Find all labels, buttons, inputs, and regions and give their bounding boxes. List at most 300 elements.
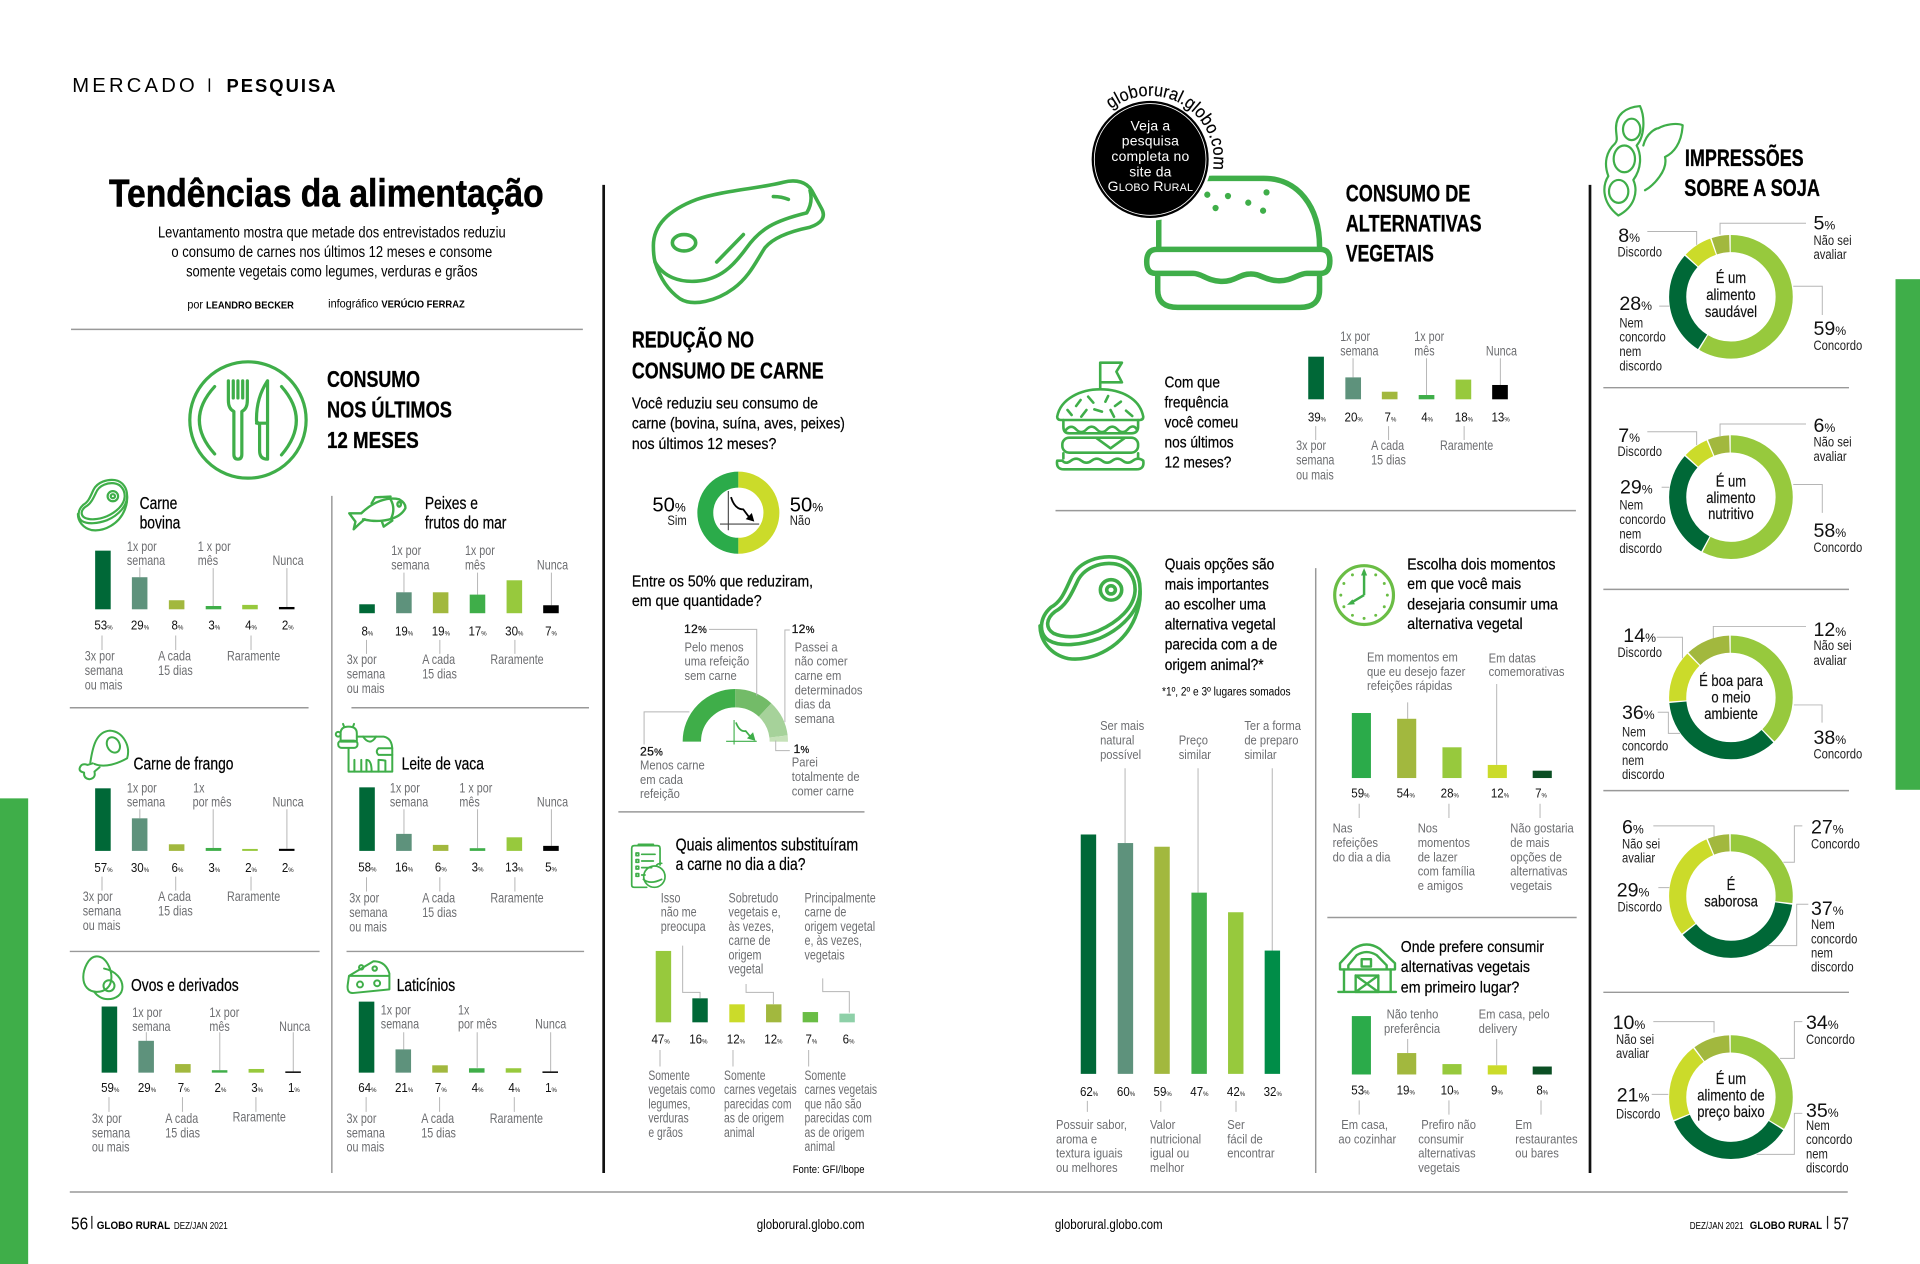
bar chart: momentos: refeições rápidas [1367, 678, 1452, 693]
bar chart: peixes: 30% [505, 624, 524, 638]
bar chart: carne bovina: Raramente [227, 648, 280, 664]
icon: soybean pod [1604, 106, 1683, 216]
heading [676, 835, 858, 874]
half donut chart: quantidade: dias da [795, 697, 831, 712]
heading: consumo nos últimos 12 meses: CONSUMO [327, 366, 420, 392]
section label: Mercado | Pesquisa: MERCADO [72, 75, 195, 97]
donut: saborosa: 29% [1617, 880, 1649, 902]
bar chart: opções: de preparo [1244, 733, 1299, 748]
section label: Mercado | Pesquisa [72, 75, 336, 97]
bar chart: frequência: semana [1340, 343, 1379, 359]
bar chart: leite: semana [349, 905, 388, 920]
question: reduziu consumo: Você reduziu seu consumo de [632, 395, 818, 412]
bar chart: carne bovina: semana [85, 663, 123, 678]
question: alternativa vegetal [1407, 616, 1523, 633]
question: com que frequência: Com que [1164, 374, 1220, 392]
bar chart: momentos: 28% [1441, 786, 1459, 801]
bar chart: frango: 1x por [127, 780, 157, 796]
heading: a carne no dia a dia? [676, 854, 805, 874]
half donut chart: quantidade: carne em [795, 668, 841, 683]
bar chart: laticínios: semana [347, 1125, 385, 1141]
bar chart: frequência: mês [1414, 343, 1435, 359]
bar chart: onde: ao cozinhar [1338, 1132, 1396, 1146]
donut: preço baixo: concordo [1806, 1131, 1852, 1147]
bar chart: laticínios: semana [381, 1016, 419, 1032]
half donut chart: quantidade: sem carne [684, 668, 737, 683]
donut: alimento nutritivo: É um [1716, 473, 1746, 491]
panel: redução no consumo de carne [632, 181, 863, 801]
bar chart: alimentos substitutos [648, 890, 877, 1154]
bar chart: carne bovina: 3x por [85, 648, 115, 664]
panel: consumo de alternativas vegetais [1056, 86, 1517, 483]
bar chart: opções: 60% [1117, 1084, 1135, 1099]
panel: leite de vaca [336, 724, 568, 935]
bar chart: carne bovina [85, 539, 304, 693]
bar chart: carne bovina: mês [198, 553, 218, 569]
heading: bovina [140, 514, 180, 533]
bar chart: opções: natural [1100, 733, 1134, 748]
bar chart: frango: Nunca [272, 794, 304, 810]
bar chart: leite: Nunca [537, 794, 568, 810]
bar chart: alimentos substitutos: vegetais e, [729, 905, 781, 920]
bar chart: leite: semana [390, 794, 428, 810]
bar chart: leite: 5% [545, 860, 557, 875]
heading: Ovos e derivados [131, 977, 239, 996]
bar chart: alimentos substitutos: e, às vezes, [804, 933, 862, 948]
donut: boa para o meio ambiente: Nem [1622, 723, 1646, 740]
icon: steak [78, 480, 127, 530]
donut: boa para o meio ambiente: concordo [1622, 737, 1668, 754]
question: Quais opções são [1165, 557, 1274, 574]
bar chart: opções: melhor [1150, 1160, 1184, 1175]
icon: cheese [348, 961, 389, 993]
bar chart: peixes: 7% [545, 624, 557, 638]
bar chart: onde: Em casa, pelo [1479, 1007, 1550, 1022]
bar chart: leite: A cada [422, 890, 455, 906]
intro text [158, 225, 506, 281]
bar chart: alimentos substitutos: Somente [804, 1068, 846, 1083]
bar chart: momentos: com família [1418, 864, 1475, 879]
bar chart: momentos: e amigos [1418, 878, 1463, 893]
heading: consumo nos últimos 12 meses: NOS ÚLTIMOS [327, 396, 452, 423]
bar chart: laticínios: 15 dias [421, 1125, 456, 1141]
donut: saborosa: Não sei [1622, 835, 1660, 852]
half donut chart: quantidade: semana [795, 711, 835, 726]
panel: carne de frango [80, 731, 304, 933]
footer: left page: 56 [71, 1213, 88, 1233]
donut chart: 50% sim, 50% não: 50% [790, 494, 823, 516]
heading: Carne [140, 494, 177, 513]
bar chart: momentos: refeições [1333, 835, 1378, 850]
donut: boa para o meio ambiente [1618, 619, 1862, 782]
bar chart: peixes [347, 543, 568, 696]
donut: alimento saudável: Nem [1619, 314, 1643, 331]
bar chart: onde: Em [1515, 1117, 1532, 1132]
footer: right page: globorural.globo.com [1055, 1217, 1163, 1232]
donut: boa para o meio ambiente: Não sei [1813, 637, 1852, 654]
bar chart: alimentos substitutos: parecidas com [724, 1096, 791, 1112]
question: origem animal?* [1165, 657, 1264, 674]
donut: boa para o meio ambiente: discordo [1622, 766, 1665, 782]
half donut chart: quantidade: comer carne [792, 784, 854, 799]
bar chart: opções: Ser mais [1100, 718, 1144, 733]
bar chart: alimentos substitutos: Somente [724, 1068, 766, 1083]
bar chart: frequência: 18% [1455, 410, 1473, 425]
bar chart: frequência: 1x por [1340, 329, 1370, 344]
donut: boa para o meio ambiente: ambiente [1704, 706, 1758, 723]
half donut chart: quantidade: 12% [684, 622, 707, 636]
footer: left page: GLOBO RURAL [97, 1220, 171, 1232]
bar chart: momentos: de mais [1510, 835, 1549, 850]
bar chart: frango: 2% [282, 861, 294, 875]
half donut chart: quantidade: uma refeição [684, 654, 750, 669]
bar chart: laticínios: 7% [435, 1081, 447, 1095]
icon: big burger [1147, 178, 1330, 307]
bar chart: alimentos substitutos: carne de [729, 933, 771, 948]
bar chart: frango: 1x [193, 780, 204, 796]
bar chart: momentos: de lazer [1418, 850, 1458, 864]
bar chart: momentos: Em momentos em [1367, 650, 1458, 665]
bar chart: opções: igual ou [1150, 1146, 1189, 1161]
donut: alimento nutritivo: avaliar [1813, 448, 1847, 464]
bar chart: leite: 15 dias [422, 905, 457, 920]
bar chart: opções: Ter a forma [1244, 718, 1301, 733]
bar chart: peixes: 8% [361, 624, 374, 638]
question: ao escolher uma [1165, 597, 1267, 614]
donut: preço baixo: discordo [1806, 1159, 1849, 1176]
bar chart: alimentos substitutos: legumes, [648, 1096, 690, 1112]
donut: alimento nutritivo: Não sei [1813, 433, 1852, 450]
icon: barn [1338, 944, 1396, 992]
donut: alimento nutritivo: discordo [1619, 540, 1662, 556]
donut chart: 50% sim, 50% não: Não [790, 512, 810, 528]
bar chart: momentos: 59% [1351, 786, 1370, 801]
bar chart: ovos: 3% [251, 1081, 263, 1095]
question: em que quantidade: em que quantidade? [632, 593, 762, 610]
bar chart: frequência: Nunca [1486, 343, 1517, 359]
bar chart: carne bovina: 4% [245, 618, 257, 633]
bar chart: alimentos substitutos: origem vegetal [804, 919, 875, 934]
donut: boa para o meio ambiente: Concordo [1813, 745, 1862, 762]
donut: saborosa: Discordo [1618, 898, 1662, 915]
bar chart: frequência: 1x por [1414, 329, 1444, 344]
bar chart: frequência: A cada [1371, 438, 1404, 453]
bar chart: onde: 10% [1441, 1083, 1459, 1098]
bar chart: onde: consumir [1418, 1132, 1464, 1146]
bar chart: peixes: 19% [432, 624, 450, 638]
donut: preço baixo: Discordo [1616, 1105, 1660, 1122]
intro text: somente vegetais como legumes, verduras e grãos [186, 264, 478, 281]
heading: REDUÇÃO NO [632, 329, 754, 353]
donut: alimento nutritivo: 6% [1813, 415, 1835, 437]
donut: preço baixo: 34% [1806, 1012, 1839, 1034]
bar chart: onde: Em casa, [1341, 1117, 1388, 1132]
callout: veja a pesquisa completa: completa no [1111, 148, 1189, 164]
donut: alimento saudável: Não sei [1813, 232, 1852, 248]
panel: laticínios [347, 961, 566, 1155]
donut: saborosa: concordo [1811, 930, 1857, 947]
heading [1684, 144, 1820, 202]
half donut chart: quantidade: Menos carne [640, 758, 705, 773]
bar chart: ovos: 59% [101, 1081, 120, 1095]
donut: alimento saudável: É um [1716, 270, 1746, 288]
bar chart: onde: ou bares [1515, 1146, 1559, 1161]
donut: saborosa: nem [1811, 944, 1833, 961]
bar chart: opções: fácil de [1227, 1132, 1263, 1146]
bar chart: frango [83, 780, 304, 933]
bar chart: momentos [1333, 650, 1574, 893]
question: parecida com a de [1165, 637, 1277, 654]
bar chart: carne bovina: 8% [172, 618, 184, 633]
bar chart: carne bovina: 1x por [127, 539, 157, 554]
heading: SOBRE A SOJA [1684, 175, 1820, 202]
donut: alimento saudável: 28% [1619, 293, 1652, 315]
panel: carne bovina [78, 480, 304, 693]
bar chart: peixes: 19% [395, 624, 414, 638]
bar chart: momentos: vegetais [1510, 878, 1552, 893]
bar chart: opções [1056, 718, 1301, 1175]
question [1401, 939, 1545, 997]
bar chart: momentos: comemorativas [1489, 664, 1565, 679]
donut: saborosa: 37% [1811, 898, 1844, 920]
callout: veja a pesquisa completa: pesquisa [1122, 133, 1179, 149]
donut: saborosa [1617, 816, 1860, 975]
bar chart: ovos: mês [209, 1019, 230, 1034]
bar chart: onde: 9% [1491, 1083, 1503, 1098]
bar chart: peixes: 3x por [347, 652, 377, 667]
donut: alimento saudável [1618, 213, 1862, 374]
donut: preço baixo: avaliar [1616, 1045, 1650, 1061]
bar chart: leite: 6% [435, 860, 447, 875]
panel: opções mais importantes [1040, 557, 1301, 1175]
bar chart: frequência: semana [1296, 453, 1335, 468]
panel: quais alimentos substituíram [632, 835, 877, 1176]
callout: veja a pesquisa completa: Veja a [1130, 117, 1170, 133]
bar chart: alimentos substitutos: 6% [843, 1032, 855, 1046]
bar chart: onde: Prefiro não [1421, 1117, 1476, 1132]
bar chart: momentos: Não gostaria [1510, 821, 1574, 836]
icon: chicken leg [80, 731, 128, 779]
bar chart: alimentos substitutos: carne de [804, 905, 847, 920]
bar chart: opções: encontrar [1227, 1146, 1275, 1161]
question: desejaria consumir uma [1407, 597, 1558, 614]
donut: preço baixo [1613, 1012, 1855, 1176]
donut: preço baixo: alimento de [1697, 1087, 1765, 1105]
donut: boa para o meio ambiente: Discordo [1618, 644, 1662, 660]
question: em primeiro lugar? [1401, 980, 1519, 997]
bar chart: opções: 59% [1154, 1084, 1172, 1099]
donut: preço baixo: Concordo [1806, 1031, 1855, 1047]
donut: alimento saudável: 5% [1813, 213, 1835, 235]
question: em que quantidade: Entre os 50% que reduziram, [632, 573, 813, 590]
intro text: o consumo de carnes nos últimos 12 meses e consome [171, 244, 492, 261]
bar chart: onde [1338, 1007, 1578, 1175]
question: reduziu consumo: carne (bovina, suína, aves, peixes) [632, 416, 845, 433]
question [1407, 556, 1558, 633]
bar chart: frequência: 15 dias [1371, 453, 1406, 468]
donut: preço baixo: Não sei [1616, 1031, 1654, 1047]
panel: ovos e derivados [83, 956, 311, 1155]
bar chart: alimentos substitutos: 7% [805, 1032, 818, 1046]
icon: eggs [83, 956, 122, 999]
bar chart: alimentos substitutos: animal [804, 1139, 835, 1154]
bar chart: alimentos substitutos: e grãos [648, 1124, 683, 1140]
donut: alimento saudável: alimento [1706, 287, 1756, 304]
half donut chart: quantidade: 12% [792, 622, 815, 636]
bar chart: ovos: 1x por [132, 1005, 162, 1020]
bar chart: laticínios [347, 1002, 566, 1155]
bar chart: opções: similar [1244, 747, 1277, 762]
bar chart: frango: 15 dias [158, 903, 193, 919]
bar chart: momentos: do dia a dia [1333, 850, 1391, 864]
bar chart: carne bovina: Nunca [272, 553, 304, 569]
half donut chart: quantidade: totalmente de [792, 769, 860, 784]
icon: clock [1335, 566, 1393, 624]
bar chart: leite: 3% [472, 860, 484, 875]
footer: left page: DEZ/JAN 2021 [174, 1221, 228, 1232]
donut: saborosa: É [1727, 877, 1735, 894]
panel: consumo nos últimos 12 meses [190, 362, 452, 478]
bar chart: opções: possível [1100, 747, 1141, 762]
bar chart: laticínios: 1% [545, 1081, 557, 1095]
bar chart: alimentos substitutos: preocupa [661, 919, 706, 934]
footer: right page: DEZ/JAN 2021 [1690, 1221, 1744, 1232]
bar chart: opções: nutricional [1150, 1132, 1201, 1146]
donut: saborosa: 6% [1622, 816, 1644, 838]
heading: CONSUMO DE CARNE [632, 360, 824, 384]
bar chart: ovos: A cada [165, 1111, 198, 1126]
bar chart: frequência: 3x por [1296, 438, 1326, 453]
bar chart: laticínios: ou mais [347, 1140, 384, 1155]
question: reduziu consumo [632, 395, 845, 453]
bar chart: ovos: 1x por [209, 1005, 239, 1020]
bar chart: opções: 47% [1190, 1084, 1209, 1099]
bar chart: alimentos substitutos: vegetal [729, 961, 763, 977]
bar chart: frequência: 7% [1385, 410, 1397, 425]
bar chart: ovos: 29% [138, 1081, 156, 1095]
bar chart: alimentos substitutos: vegetais [804, 947, 845, 963]
donut: alimento nutritivo: 29% [1620, 477, 1653, 499]
bar chart: onde: delivery [1479, 1021, 1517, 1036]
icon: plate with fork and knife [190, 362, 306, 478]
donut: alimento nutritivo: Nem [1619, 497, 1643, 513]
bar chart: laticínios: 64% [358, 1081, 377, 1095]
bar chart: onde: 8% [1536, 1083, 1548, 1098]
bar chart: laticínios: por mês [458, 1016, 497, 1032]
half donut chart: quantidade: Parei [792, 755, 818, 769]
half donut chart: quantidade: 1% [793, 742, 810, 756]
bar chart: ovos: Nunca [279, 1019, 311, 1034]
bar chart: alimentos substitutos: as de origem [724, 1110, 784, 1126]
bar chart: opções: aroma e [1056, 1132, 1097, 1146]
bar chart: laticínios: Raramente [490, 1111, 543, 1126]
donut: preço baixo: Nem [1806, 1117, 1830, 1133]
bar chart: onde: vegetais [1418, 1160, 1460, 1175]
question: com que frequência: você comeu [1164, 415, 1238, 432]
bar chart: alimentos substitutos: não me [661, 905, 697, 920]
bar chart: frequência [1296, 329, 1517, 483]
donut: alimento saudável: discordo [1619, 357, 1662, 374]
bar chart: ovos: ou mais [92, 1140, 130, 1155]
bar chart: ovos: Raramente [233, 1109, 286, 1125]
donut chart: 50% sim, 50% não [652, 480, 823, 546]
donut: alimento saudável: concordo [1619, 328, 1666, 345]
bar chart: alimentos substitutos: Sobretudo [729, 890, 778, 906]
title: Tendências da alimentação [109, 172, 544, 215]
donut: alimento nutritivo: nutritivo [1708, 506, 1754, 524]
bar chart: momentos: que eu desejo fazer [1367, 664, 1465, 679]
byline [187, 297, 465, 312]
bar chart: peixes: Raramente [490, 652, 544, 667]
question: com que frequência: 12 meses? [1164, 455, 1231, 472]
heading: frutos do mar [425, 514, 507, 533]
bar chart: opções: ou melhores [1056, 1160, 1118, 1175]
bar chart: carne bovina: 2% [282, 618, 294, 633]
half donut chart: quantidade: determinados [795, 683, 863, 698]
panel: dois momentos [1333, 556, 1574, 893]
donut: boa para o meio ambiente: nem [1622, 752, 1644, 768]
bar chart: opções: Possuir sabor, [1056, 1117, 1127, 1132]
heading: ALTERNATIVAS [1346, 211, 1482, 238]
question: em que você mais [1407, 576, 1521, 593]
donut: boa para o meio ambiente: É boa para [1699, 673, 1763, 691]
bar chart: peixes: 1x por [465, 543, 495, 558]
bar chart: alimentos substitutos: vegetais como [648, 1082, 715, 1098]
bar chart: onde: preferência [1384, 1021, 1440, 1036]
bar chart: ovos: 2% [215, 1081, 227, 1095]
bar chart: peixes: Nunca [537, 557, 568, 573]
callout: veja a pesquisa completa: globorural.globo.com [1107, 86, 1224, 169]
bar chart: carne bovina: 15 dias [158, 663, 193, 678]
footer: left page: globorural.globo.com [757, 1217, 864, 1232]
bar chart: ovos: 3x por [92, 1111, 122, 1126]
bar chart: alimentos substitutos: verduras [648, 1110, 689, 1126]
footer: right page: GLOBO RURAL [1750, 1220, 1822, 1232]
question: com que frequência: nos últimos [1164, 435, 1234, 452]
half donut chart: quantidade: refeição [640, 786, 680, 801]
donut: alimento saudável: nem [1619, 343, 1641, 359]
bar chart: peixes: semana [347, 666, 385, 682]
question: com que frequência: frequência [1164, 395, 1229, 412]
half donut chart: quantidade: Passei a [795, 640, 838, 655]
bar chart: laticínios: 4% [472, 1081, 484, 1095]
donut: preço baixo: É um [1716, 1071, 1746, 1088]
byline: por LEANDRO BECKER [187, 299, 295, 312]
bar chart: carne bovina: A cada [158, 648, 191, 664]
bar chart: frequência: 39% [1308, 410, 1326, 425]
donut chart: 50% sim, 50% não: Sim [667, 512, 687, 528]
bar chart: alimentos substitutos: 12% [727, 1032, 745, 1046]
donut: preço baixo: nem [1806, 1145, 1828, 1162]
bar chart: peixes: 15 dias [422, 666, 457, 682]
bar chart: alimentos substitutos: Somente [648, 1068, 690, 1083]
bar chart: peixes: mês [465, 557, 485, 573]
heading: Quais alimentos substituíram [676, 835, 858, 855]
donut: alimento nutritivo: Concordo [1813, 539, 1862, 556]
bar chart: alimentos substitutos: que não são [804, 1096, 862, 1112]
donut chart: 50% sim, 50% não: 50% [652, 494, 686, 516]
bar chart: frequência: 13% [1492, 410, 1510, 425]
bar chart: alimentos substitutos: animal [724, 1124, 755, 1140]
question: alternativas vegetais [1401, 959, 1530, 976]
donut: preço baixo: 21% [1617, 1085, 1649, 1107]
bar chart: laticínios: 3x por [347, 1111, 376, 1126]
heading [1346, 181, 1482, 268]
donut: alimento nutritivo: concordo [1619, 511, 1666, 528]
donut: preço baixo: preço baixo [1697, 1104, 1765, 1122]
donut: alimento saudável: 59% [1813, 318, 1846, 340]
bar chart: frango: semana [83, 903, 121, 919]
